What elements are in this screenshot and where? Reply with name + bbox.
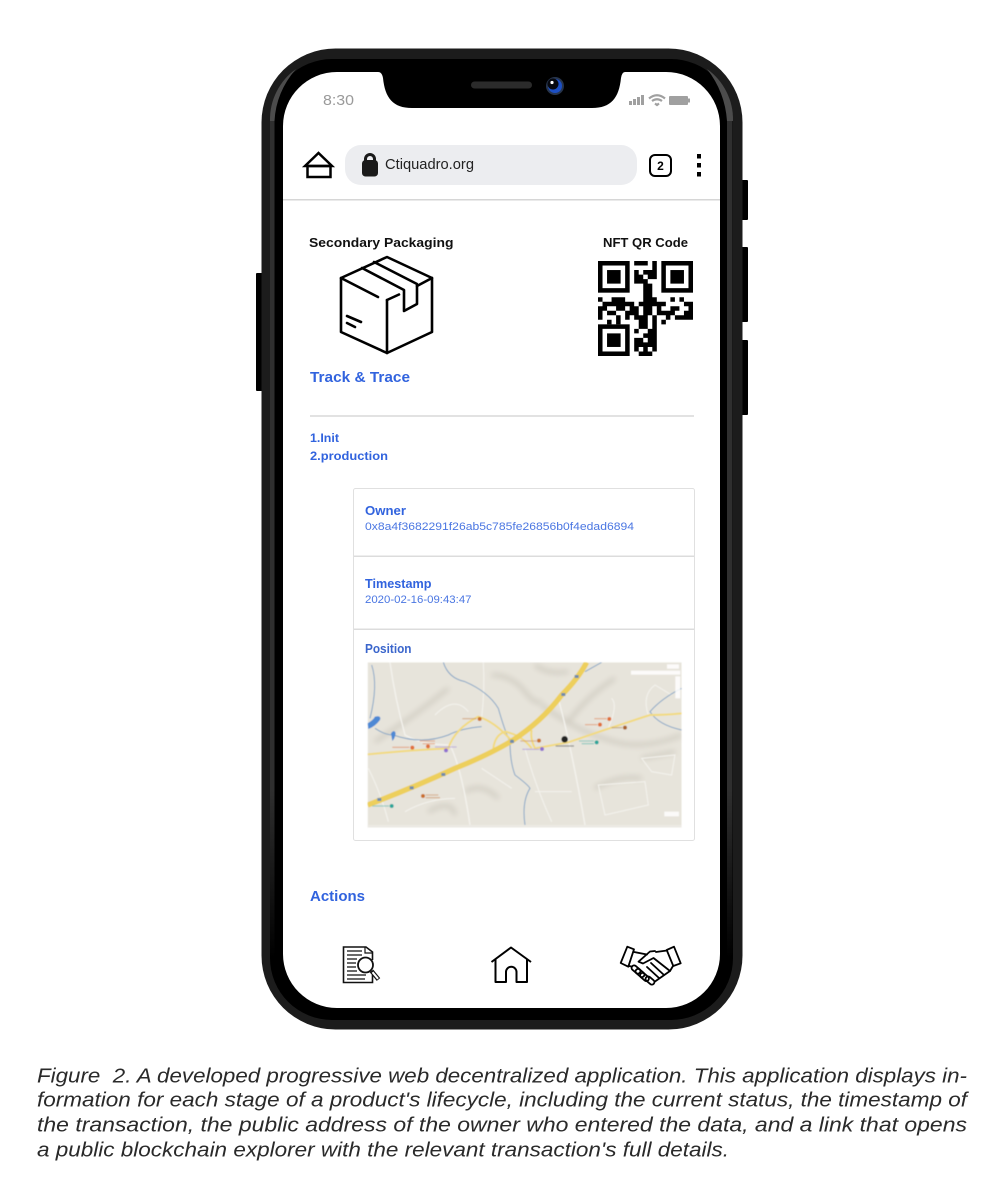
pin captions [372,719,622,806]
heading: NFT QR code: NFT QR Code [603,235,688,250]
tab counter [650,155,671,176]
timestamp: Timestamp [365,577,432,591]
icon: battery [669,96,690,105]
caption: formation for each stage of a product's lifecycle, including the current status, the timestamp of [37,1090,970,1112]
heading: track and trace: Track & Trace [310,369,410,386]
terrain shading [375,665,682,815]
panel: stage details [354,488,694,840]
phone body [262,48,742,1030]
bottom navigation [344,947,681,986]
icon: lock [362,154,378,176]
phone [256,48,748,1030]
icon: wifi [649,95,665,105]
icon: home [492,948,531,982]
map footer [369,826,680,827]
owner [365,504,634,533]
camera [546,77,564,95]
card frame [354,488,694,840]
icon: signal [629,95,644,105]
inner bezel [270,59,733,1020]
water bodies [368,716,396,741]
stage list [310,431,388,463]
caption [37,1066,970,1162]
rivers [370,662,682,825]
icon: package box [341,257,432,353]
timestamp [365,577,472,606]
owner: Owner [365,504,406,518]
icon: browser home [305,153,332,177]
icon: menu dots [697,154,701,176]
notch [378,72,625,108]
timestamp: 2020-02-16-09:43:47 [365,594,472,606]
white roads [368,662,675,825]
address pill [345,145,637,185]
QR code [598,263,693,354]
heading: actions: Actions [310,888,365,905]
tab counter: 2 [657,159,664,173]
secondary roads [368,713,682,754]
pins [390,717,627,808]
corner highlights [270,69,733,121]
screen [283,72,720,1008]
status bar [323,92,690,109]
side buttons [256,180,748,415]
stage 1: 1.Init [310,431,339,445]
position label: Position [365,642,412,656]
icon: document search [344,947,378,982]
highway [368,662,587,805]
address text: Ctiquadro.org [385,156,474,173]
stage 2: 2.production [310,449,388,463]
heading: secondary packaging: Secondary Packaging [309,235,454,250]
icon: handshake [621,947,681,986]
caption: a public blockchain explorer with the relevant transaction's full details. [37,1140,729,1162]
caption: the transaction, the public address of the owner who entered the data, and a link that opens [37,1114,967,1136]
side highlights [270,121,732,958]
owner: 0x8a4f3682291f26ab5c785fe26856b0f4edad6894 [365,521,634,533]
caption: Figure 2. A developed progressive web decentralized application. This application displays in- [37,1066,967,1088]
speaker [471,82,532,88]
map controls [631,664,680,816]
map [368,662,682,828]
browser bar [305,145,701,185]
highway shields [377,675,579,801]
clock: 8:30 [323,92,354,109]
